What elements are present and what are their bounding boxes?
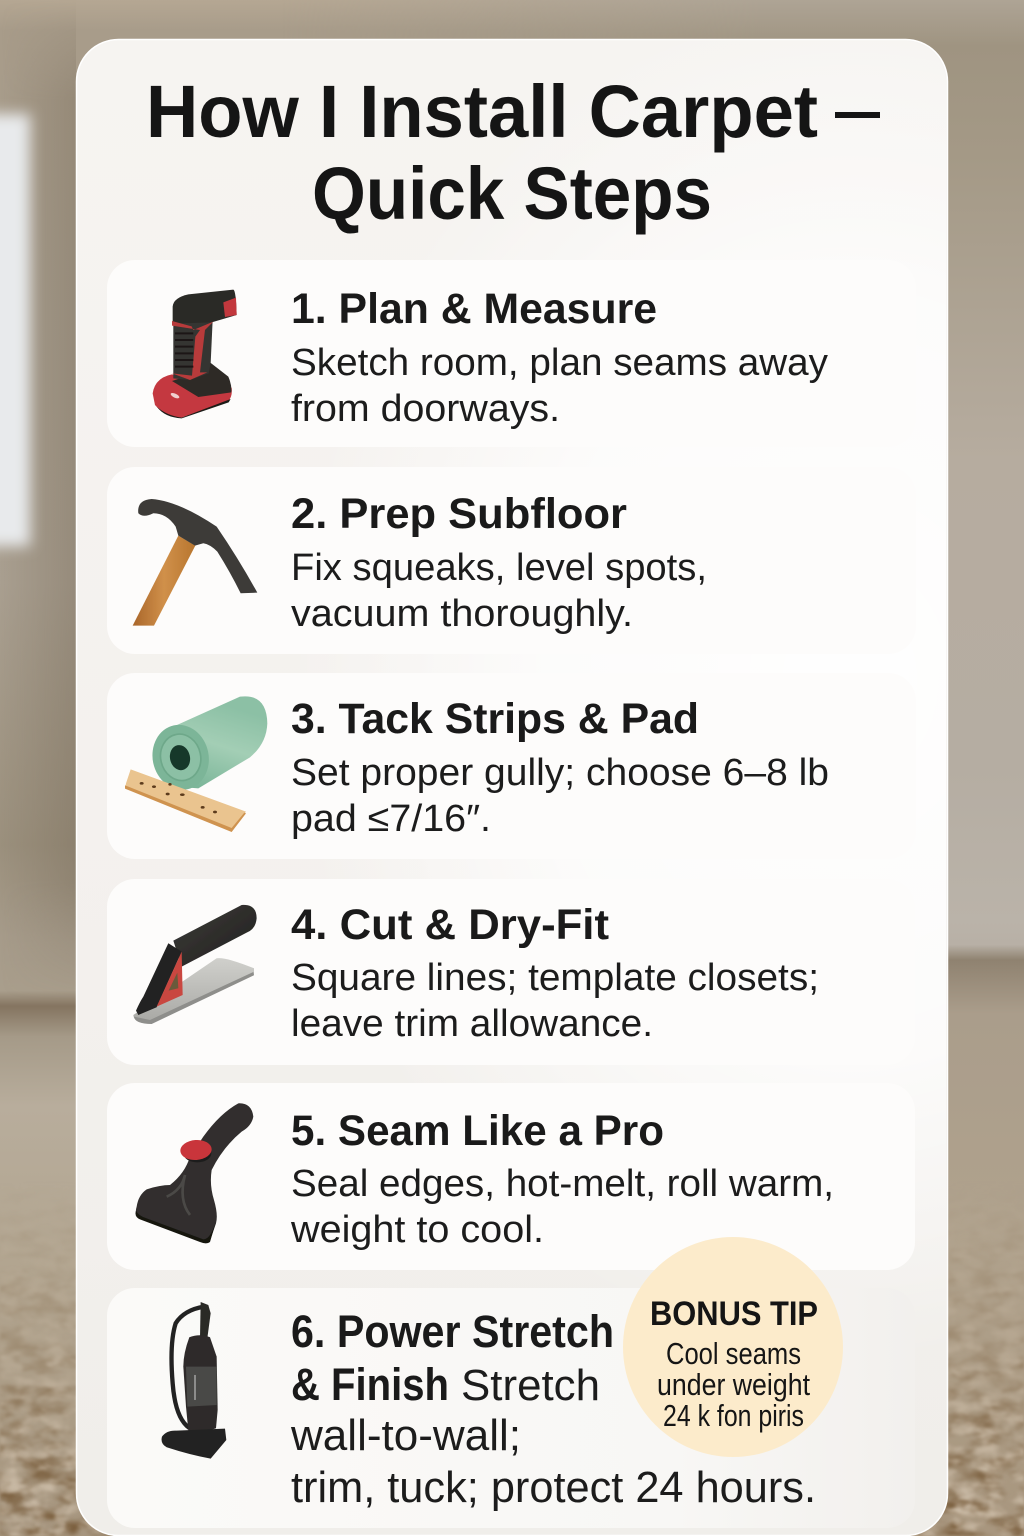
body text bbox=[290, 1163, 834, 1251]
title bbox=[146, 70, 880, 235]
icon: knee-kicker hammer bbox=[133, 499, 257, 626]
heading: 2. Prep Subfloor bbox=[291, 490, 627, 538]
heading: 1. Plan & Measure bbox=[291, 285, 657, 333]
body text: from doorways. bbox=[291, 388, 560, 430]
icon: red and black handheld tool bbox=[153, 290, 237, 418]
callout: bonus tip badge bbox=[623, 1237, 843, 1457]
heading: 5. Seam Like a Pro bbox=[291, 1107, 664, 1155]
panel: step 6 bbox=[107, 1288, 915, 1528]
body text bbox=[291, 957, 819, 1045]
icon: power stretcher upright machine bbox=[162, 1302, 226, 1459]
panel: step 3 bbox=[107, 673, 916, 859]
heading and body text bbox=[290, 1306, 816, 1512]
heading and body text: Stretch bbox=[461, 1361, 600, 1410]
icon: carpet knife with red wedge bbox=[133, 905, 257, 1024]
body text bbox=[291, 342, 828, 430]
callout: bonus tip badge: BONUS TIP bbox=[650, 1295, 818, 1333]
callout: bonus tip badge: Cool seams bbox=[666, 1336, 801, 1371]
body text bbox=[291, 547, 707, 635]
body text: pad ≤7/16″. bbox=[291, 798, 491, 840]
heading: 4. Cut & Dry-Fit bbox=[291, 901, 609, 949]
panel: step 4 bbox=[107, 879, 915, 1065]
body text: Fix squeaks, level spots, bbox=[291, 547, 707, 589]
heading: 3. Tack Strips & Pad bbox=[291, 695, 699, 743]
body text: Square lines; template closets; bbox=[291, 957, 819, 999]
icon: seaming iron with red button bbox=[135, 1103, 253, 1243]
panel: step 1 bbox=[107, 260, 916, 447]
heading and body text: 6. Power Stretch bbox=[291, 1306, 614, 1357]
body text: Sketch room, plan seams away bbox=[291, 342, 828, 384]
heading and body text: trim, tuck; protect 24 hours. bbox=[291, 1463, 816, 1512]
panel: step 2 bbox=[107, 467, 916, 654]
heading and body text: & Finish bbox=[291, 1359, 449, 1410]
icon: green pad roll and tack strip bbox=[125, 696, 267, 832]
body text: vacuum thoroughly. bbox=[291, 593, 633, 635]
callout: bonus tip badge: 24 k fon piris bbox=[663, 1398, 804, 1433]
panel: step 5 bbox=[107, 1083, 915, 1270]
title: How I Install Carpet bbox=[146, 70, 818, 153]
title: Quick Steps bbox=[312, 152, 712, 235]
body text: Set proper gully; choose 6–8 lb bbox=[291, 752, 829, 794]
heading and body text: wall-to-wall; bbox=[290, 1411, 521, 1460]
body text: Seal edges, hot-melt, roll warm, bbox=[291, 1163, 834, 1205]
callout: bonus tip badge: under weight bbox=[657, 1367, 810, 1402]
body text bbox=[291, 752, 829, 840]
body text: weight to cool. bbox=[290, 1209, 544, 1251]
body text: leave trim allowance. bbox=[291, 1003, 653, 1045]
